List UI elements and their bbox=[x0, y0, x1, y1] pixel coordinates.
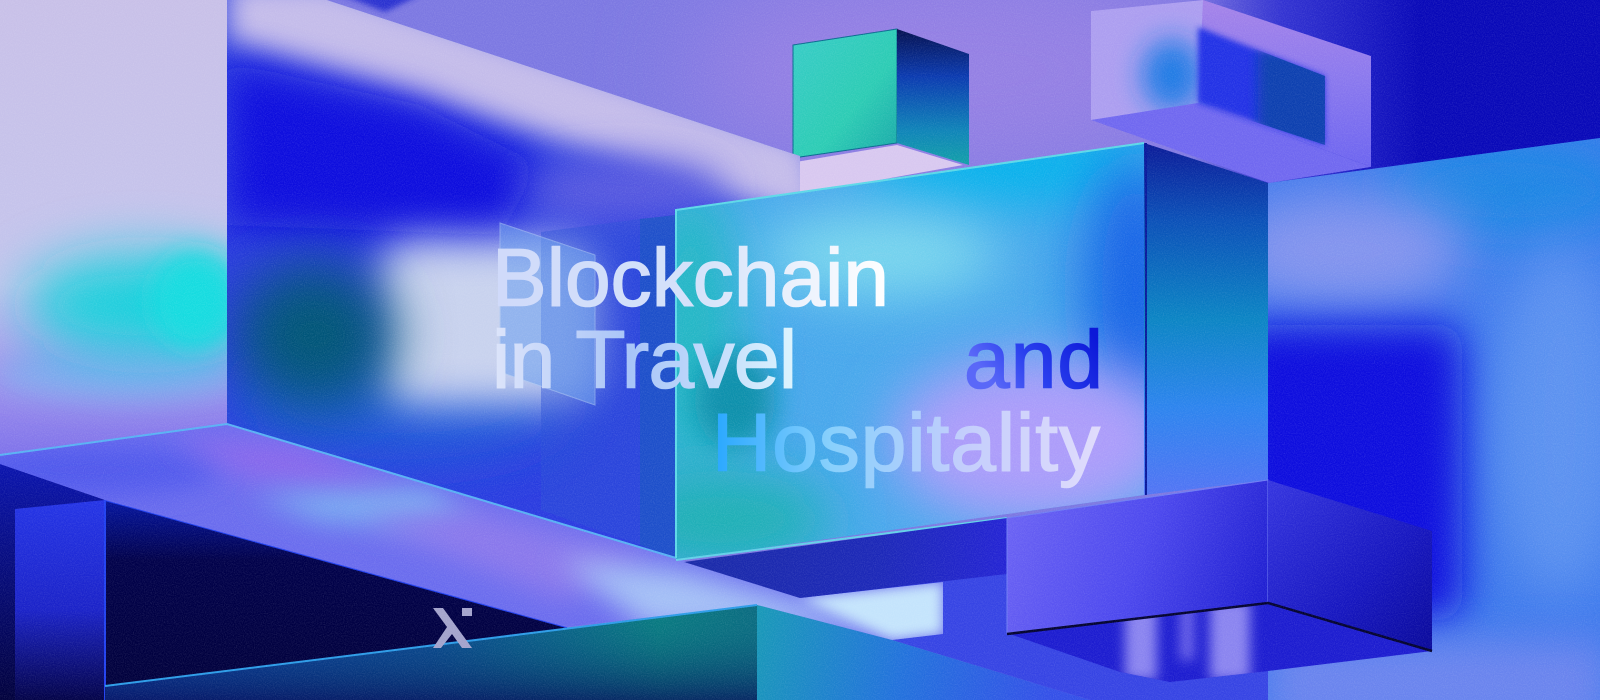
panel: lower right floor bbox=[800, 560, 1268, 700]
panel: large beam inner face bbox=[227, 0, 800, 557]
teal block side face bbox=[757, 605, 1090, 700]
cube side face bbox=[897, 29, 969, 165]
box opening bbox=[1198, 27, 1334, 150]
panel: slanted light surface bbox=[0, 425, 943, 640]
recess navy wall bbox=[105, 500, 566, 700]
title bbox=[492, 232, 1103, 488]
title word: and: and bbox=[964, 314, 1103, 406]
panel: central glass box bbox=[675, 142, 1268, 561]
tray right face bbox=[1268, 480, 1432, 651]
logo: lambda mark bbox=[433, 608, 472, 648]
icon: small teal cube bbox=[790, 29, 969, 196]
title line: in Travel: in Travel bbox=[492, 314, 797, 406]
panel: lower-left dark recess bbox=[0, 460, 566, 700]
glass front face bbox=[676, 144, 1144, 559]
tray front face bbox=[1007, 480, 1268, 633]
recess blue panel bbox=[15, 500, 105, 700]
box frame bbox=[1091, 0, 1371, 183]
ghost cube reflection bbox=[500, 223, 595, 405]
panel: lower violet tray bbox=[1000, 480, 1440, 685]
panel: right frosted wall bbox=[1268, 138, 1600, 700]
title line: Blockchain: Blockchain bbox=[492, 232, 889, 324]
panel: left lavender face with teal glow bbox=[0, 0, 227, 454]
icon: frosted hollow box top right bbox=[1091, 0, 1371, 183]
panel: bottom teal block bbox=[105, 605, 1090, 700]
bar under glass box bbox=[684, 518, 1007, 598]
ghost back box bbox=[541, 219, 640, 545]
tray underside bbox=[1012, 604, 1429, 682]
cube reflection bbox=[790, 145, 963, 196]
title line: Hospitality: Hospitality bbox=[712, 398, 1100, 488]
cube front face bbox=[793, 29, 897, 158]
glass side face bbox=[1144, 143, 1268, 495]
